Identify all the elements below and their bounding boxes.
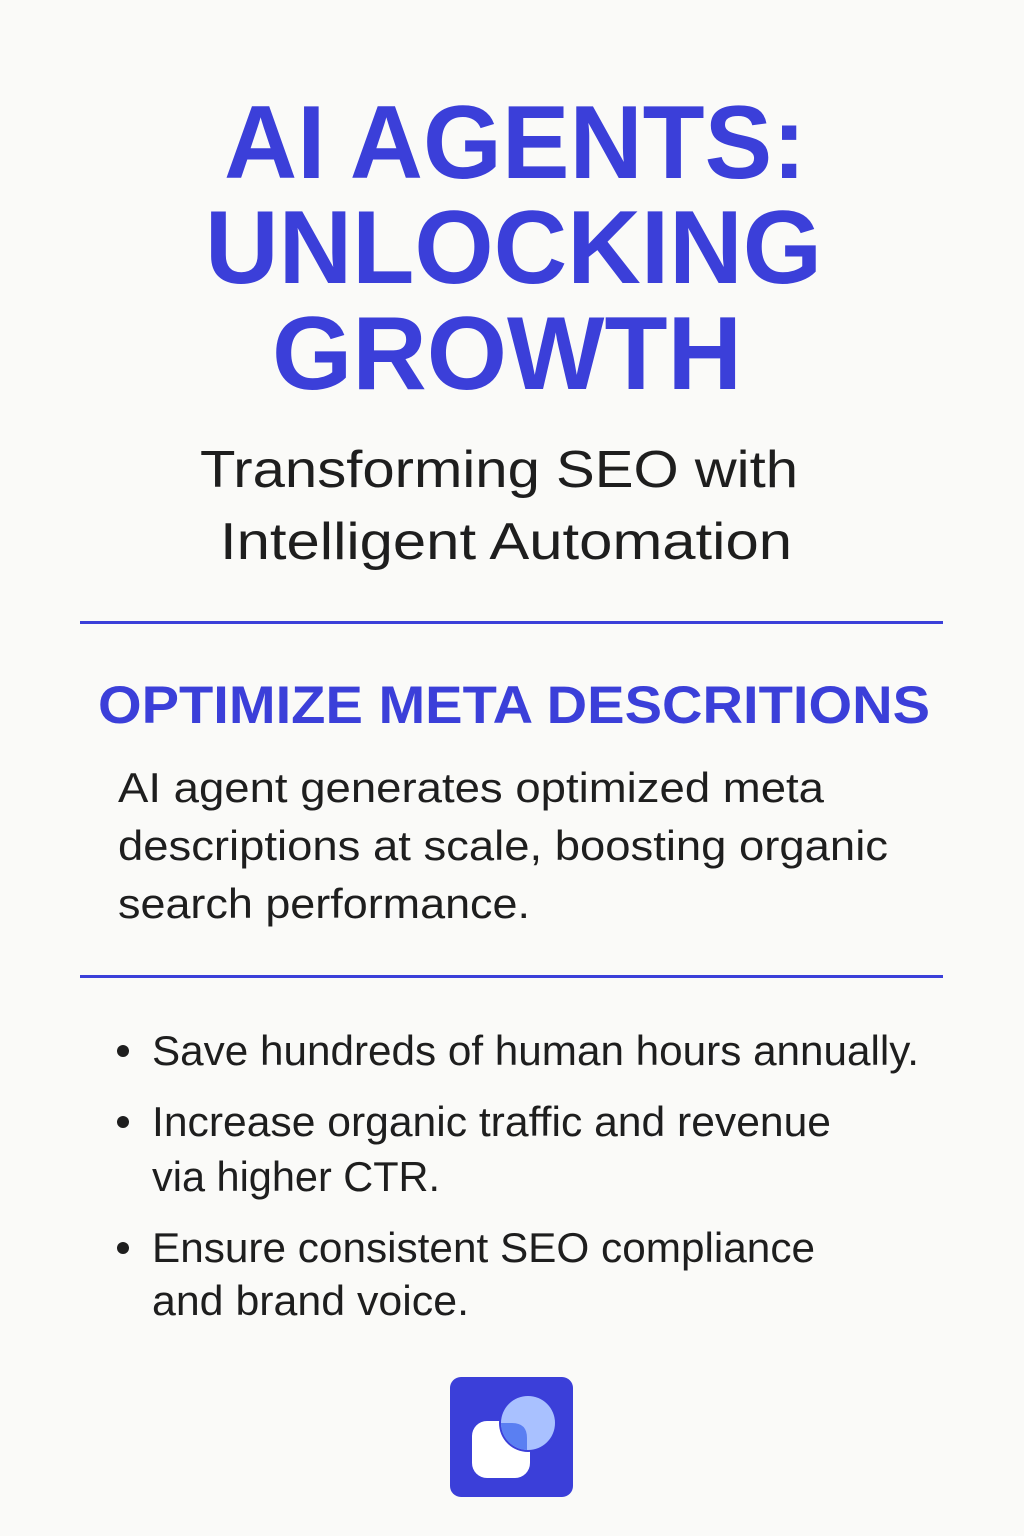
section heading: OPTIMIZE META DESCRITIONS — [98, 676, 930, 735]
description paragraph: descriptions at scale, boosting organic — [118, 822, 888, 869]
description paragraph: search performance. — [118, 880, 530, 927]
icon: app logo — [450, 1377, 573, 1497]
title: GROWTH — [272, 296, 742, 412]
bullet: increase traffic: via higher CTR. — [152, 1153, 440, 1200]
bullet: increase traffic — [117, 1098, 831, 1200]
title: UNLOCKING — [205, 190, 822, 306]
bullet: compliance: Ensure consistent SEO compliance — [152, 1224, 815, 1271]
benefits list — [117, 1027, 919, 1324]
bullet: increase traffic: Increase organic traffic and revenue — [152, 1098, 831, 1145]
title — [205, 85, 822, 412]
description paragraph — [118, 764, 888, 927]
subtitle: Intelligent Automation — [220, 513, 792, 571]
subtitle — [200, 441, 798, 571]
title: AI AGENTS: — [224, 85, 806, 201]
description paragraph: AI agent generates optimized meta — [118, 764, 825, 811]
subtitle: Transforming SEO with — [200, 441, 798, 499]
bullet: compliance — [117, 1224, 815, 1324]
bullet: compliance: and brand voice. — [152, 1277, 469, 1324]
bullet: save hours: Save hundreds of human hours annually. — [152, 1027, 919, 1074]
